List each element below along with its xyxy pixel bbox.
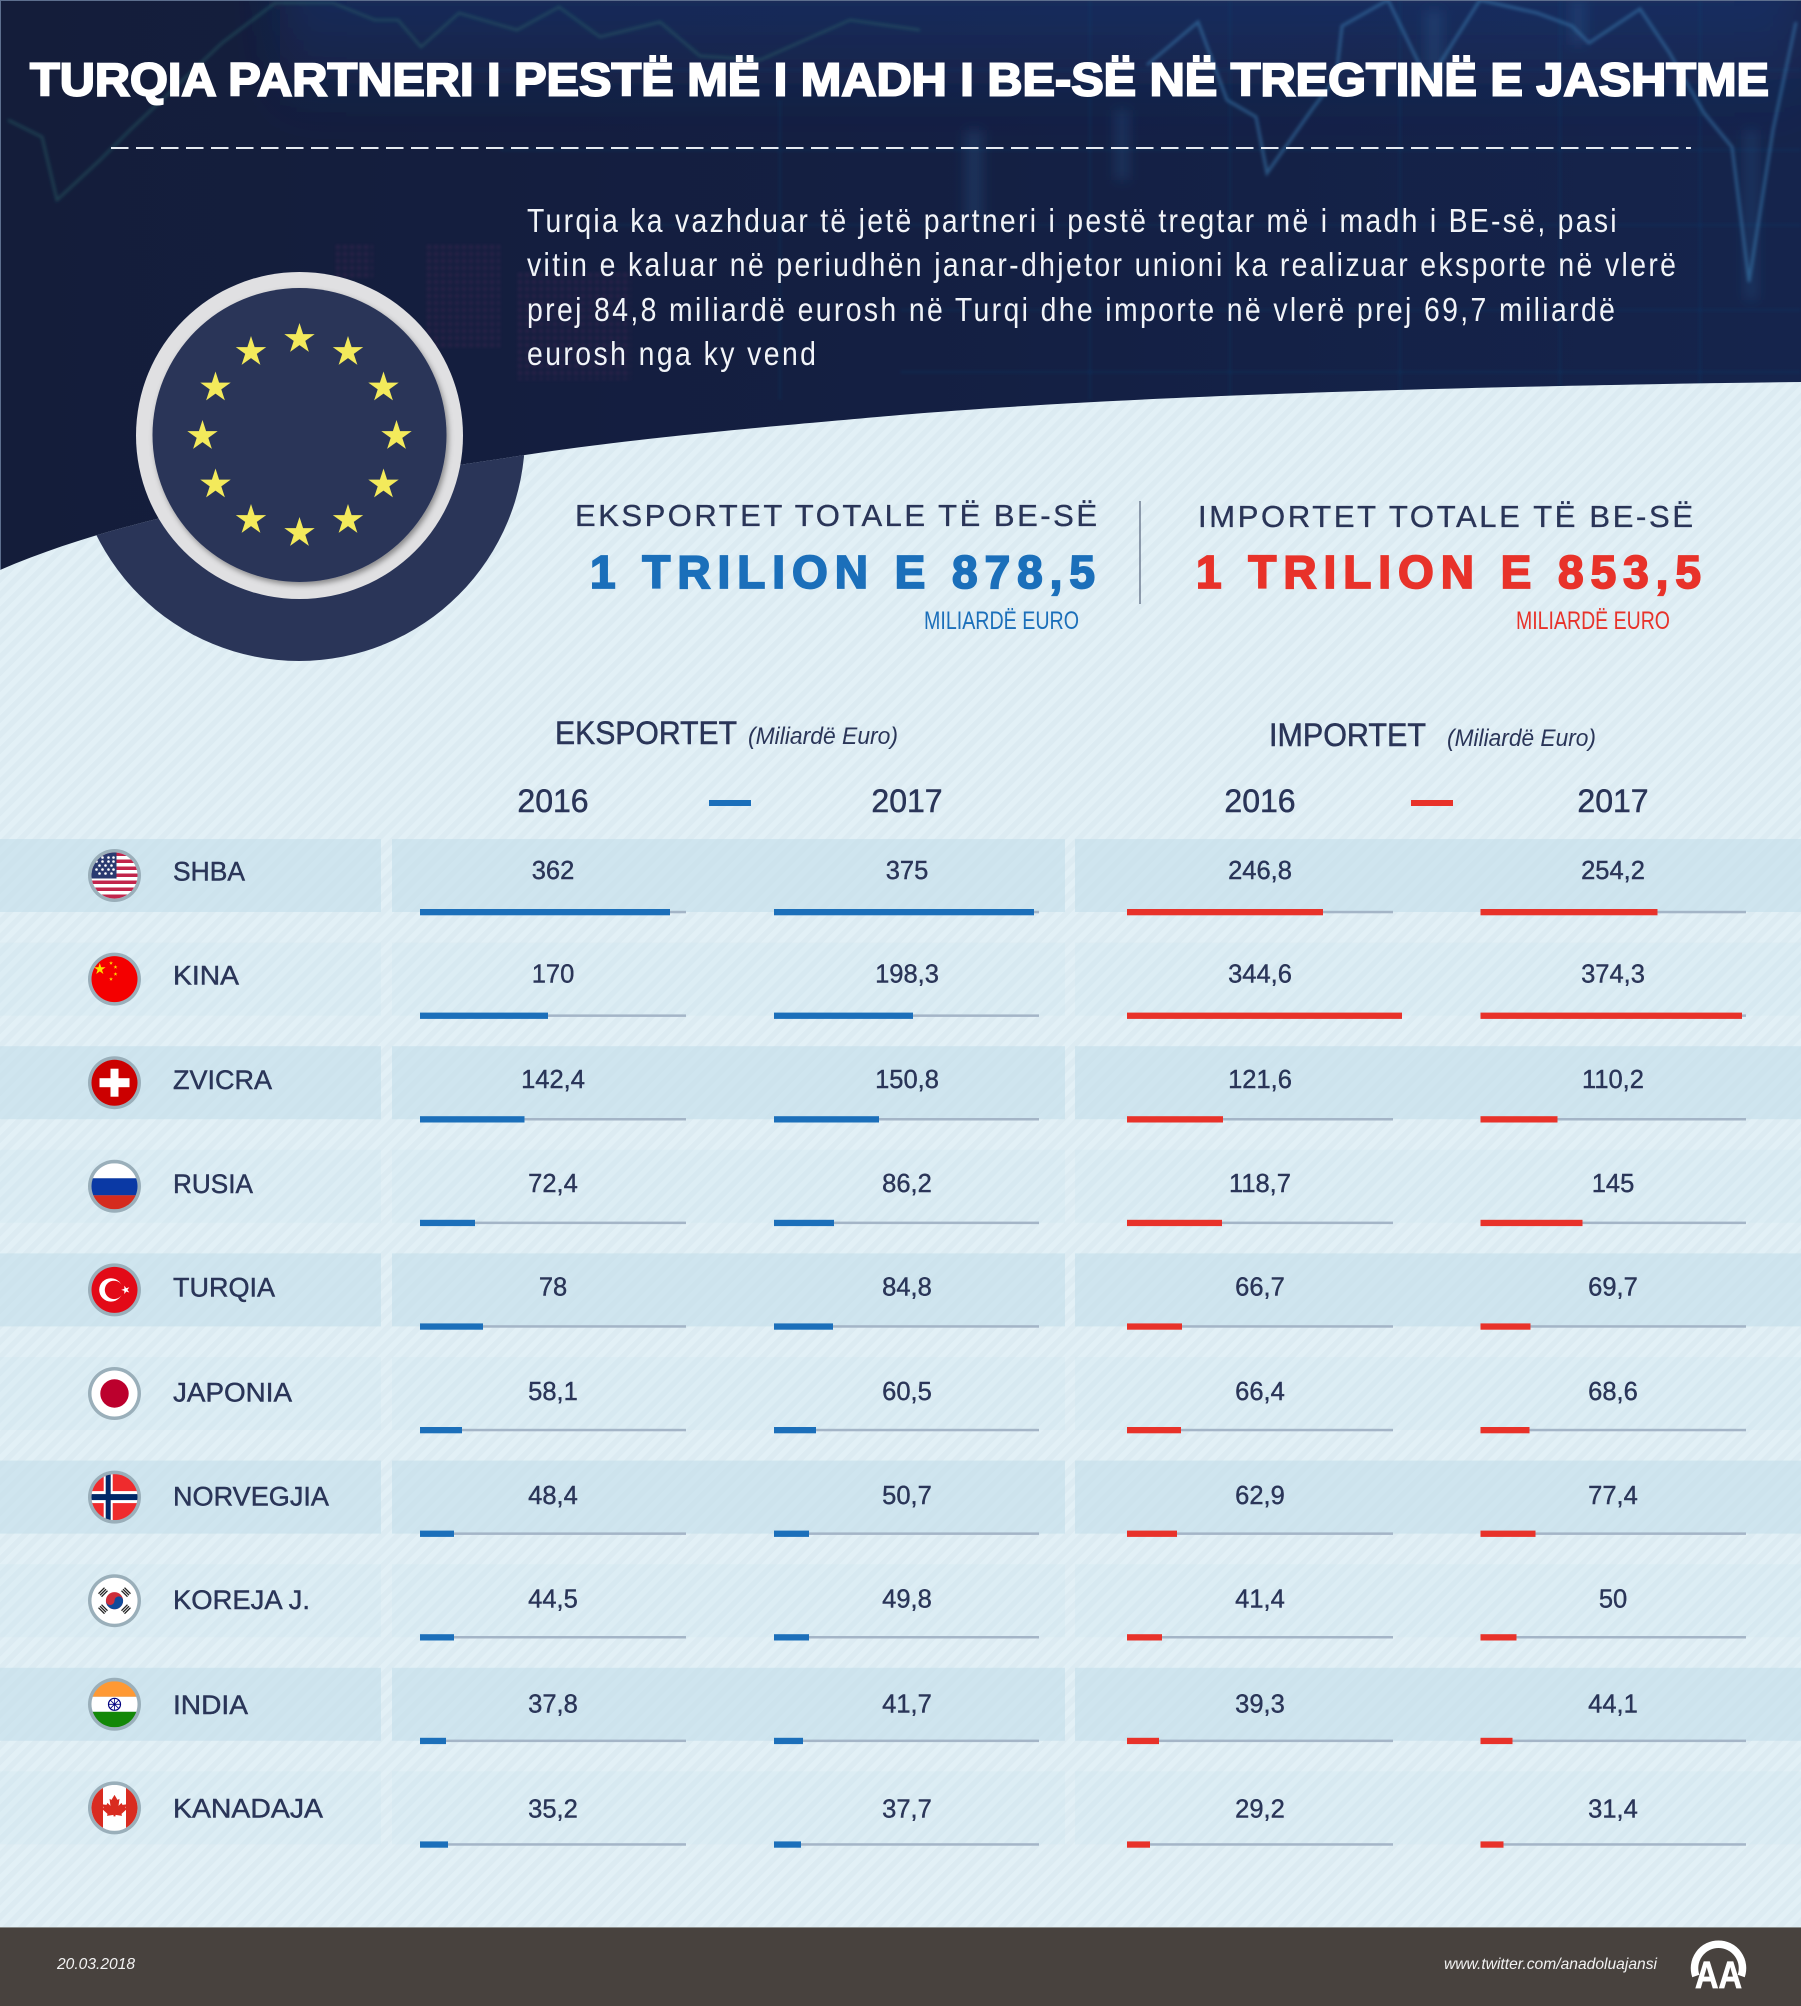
value: importe 2016: 344,6 bbox=[1228, 961, 1292, 989]
value: importe 2016: 41,4 bbox=[1235, 1586, 1285, 1614]
value: eksporte 2017: 86,2 bbox=[882, 1170, 932, 1198]
value: importe 2017 bbox=[1480, 1170, 1746, 1226]
value: importe 2017: 44,1 bbox=[1588, 1691, 1638, 1719]
value: eksporte 2017: 50,7 bbox=[882, 1482, 932, 1510]
value: eksporte 2017: 84,8 bbox=[882, 1274, 932, 1302]
value: eksporte 2017 bbox=[774, 1378, 1039, 1433]
row: INDIA bbox=[0, 1668, 1801, 1744]
row: RUSIA bbox=[88, 1160, 1746, 1226]
exports year headers: 2017 bbox=[871, 783, 943, 819]
value: eksporte 2016 bbox=[420, 1274, 686, 1330]
footer date: 20.03.2018 bbox=[56, 1956, 135, 1973]
value: importe 2016: 39,3 bbox=[1235, 1691, 1285, 1719]
row: JAPONIA bbox=[0, 1357, 1801, 1433]
icon: flag Russia bbox=[88, 1160, 141, 1213]
icon: flag Norway bbox=[88, 1471, 141, 1524]
icon: flag Canada bbox=[88, 1781, 141, 1834]
row: KINA: KINA bbox=[173, 961, 239, 991]
navy disc behind the EU emblem bbox=[96, 455, 524, 661]
value: importe 2017: 254,2 bbox=[1581, 857, 1645, 885]
value: eksporte 2016: 78 bbox=[539, 1274, 567, 1302]
value: importe 2016 bbox=[1127, 857, 1393, 915]
value: eksporte 2016 bbox=[420, 857, 686, 915]
intro text block: eurosh nga ky vend bbox=[527, 335, 816, 373]
row: KANADAJA bbox=[88, 1781, 1746, 1848]
value: importe 2016 bbox=[1127, 1066, 1393, 1122]
footer bar bbox=[0, 1927, 1801, 2006]
icon: flag Japan bbox=[88, 1367, 141, 1420]
value: importe 2017 bbox=[1480, 1066, 1746, 1122]
icon: Anadolu Agency logo: AA bbox=[1695, 1955, 1742, 1997]
value: eksporte 2017 bbox=[774, 961, 1039, 1019]
row: TURQIA: TURQIA bbox=[173, 1273, 275, 1303]
value: importe 2016: 246,8 bbox=[1228, 857, 1292, 885]
value: eksporte 2017 bbox=[774, 1170, 1039, 1226]
value: importe 2017 bbox=[1480, 1274, 1746, 1330]
value: importe 2017: 110,2 bbox=[1582, 1066, 1644, 1094]
title: TURQIA PARTNERI I PESTË MË I MADH I BE-SË NË TREGTINË E JASHTME bbox=[30, 54, 1769, 106]
imports year headers bbox=[1224, 783, 1649, 819]
value: eksporte 2016: 44,5 bbox=[528, 1586, 578, 1614]
row: ZVICRA bbox=[0, 1046, 1801, 1122]
intro text block: Turqia ka vazhduar të jetë partneri i pestë tregtar më i madh i BE-së, pasi bbox=[527, 202, 1617, 240]
value: importe 2016 bbox=[1127, 1482, 1393, 1537]
value: importe 2016 bbox=[1127, 1795, 1393, 1848]
value: importe 2016 bbox=[1127, 1691, 1393, 1744]
value: eksporte 2016: 58,1 bbox=[528, 1378, 578, 1406]
value: importe 2017 bbox=[1480, 1691, 1746, 1744]
imports column heading bbox=[1269, 717, 1596, 753]
row: KANADAJA: KANADAJA bbox=[173, 1793, 323, 1823]
exports year headers bbox=[517, 783, 943, 819]
value: importe 2017 bbox=[1480, 1586, 1746, 1640]
total imports callout: MILIARDË EURO bbox=[1516, 607, 1670, 635]
value: eksporte 2017 bbox=[774, 857, 1039, 915]
imports column heading: IMPORTET bbox=[1269, 717, 1426, 753]
value: importe 2016 bbox=[1127, 1586, 1393, 1640]
row: RUSIA: RUSIA bbox=[173, 1169, 253, 1199]
total imports callout bbox=[1196, 499, 1701, 635]
value: importe 2017: 69,7 bbox=[1588, 1274, 1638, 1302]
value: importe 2017: 145 bbox=[1592, 1170, 1634, 1198]
value: eksporte 2016 bbox=[420, 1066, 686, 1122]
value: eksporte 2017: 49,8 bbox=[882, 1586, 932, 1614]
icon: EU flag emblem bbox=[136, 272, 463, 599]
imports column heading: (Miliardë Euro) bbox=[1447, 725, 1596, 752]
total exports callout: 1 TRILION E 878,5 bbox=[590, 546, 1095, 598]
icon: flag South Korea bbox=[88, 1574, 141, 1627]
value: eksporte 2016 bbox=[420, 1482, 686, 1537]
imports year headers: 2017 bbox=[1577, 783, 1649, 819]
dashed divider bbox=[111, 147, 1691, 149]
total imports callout: 1 TRILION E 853,5 bbox=[1196, 546, 1701, 598]
value: importe 2017 bbox=[1480, 1378, 1746, 1433]
row: SHBA bbox=[0, 839, 1801, 915]
value: importe 2016: 121,6 bbox=[1228, 1066, 1292, 1094]
exports column heading bbox=[555, 715, 898, 751]
value: eksporte 2016 bbox=[420, 961, 686, 1019]
value: importe 2017 bbox=[1480, 1482, 1746, 1537]
row: KOREJA J.: KOREJA J. bbox=[173, 1585, 310, 1615]
light striped background with wave edge bbox=[0, 382, 1801, 1928]
value: eksporte 2017 bbox=[774, 1586, 1039, 1640]
value: importe 2017 bbox=[1480, 1795, 1746, 1848]
row: NORVEGJIA: NORVEGJIA bbox=[173, 1482, 329, 1512]
value: eksporte 2016: 48,4 bbox=[528, 1482, 578, 1510]
value: eksporte 2016 bbox=[420, 1586, 686, 1640]
value: eksporte 2017 bbox=[774, 1691, 1039, 1744]
value: eksporte 2017: 37,7 bbox=[882, 1795, 932, 1823]
icon: flag India bbox=[88, 1678, 141, 1731]
value: eksporte 2017 bbox=[774, 1066, 1039, 1122]
value: importe 2016: 29,2 bbox=[1235, 1795, 1285, 1823]
value: importe 2017 bbox=[1480, 961, 1746, 1019]
value: importe 2016 bbox=[1127, 961, 1402, 1019]
footer twitter link text: www.twitter.com/anadoluajansi bbox=[1444, 1956, 1657, 1973]
value: eksporte 2017: 150,8 bbox=[875, 1066, 939, 1094]
total exports callout: MILIARDË EURO bbox=[924, 607, 1079, 635]
value: importe 2016: 66,7 bbox=[1235, 1274, 1285, 1302]
value: eksporte 2017 bbox=[774, 1482, 1039, 1537]
value: eksporte 2016: 142,4 bbox=[521, 1066, 585, 1094]
value: importe 2017 bbox=[1480, 857, 1746, 915]
value: importe 2016 bbox=[1127, 1170, 1393, 1226]
row: NORVEGJIA bbox=[0, 1461, 1801, 1537]
icon: flag Switzerland bbox=[88, 1056, 141, 1109]
row: ZVICRA: ZVICRA bbox=[173, 1065, 272, 1095]
intro text block: prej 84,8 miliardë eurosh në Turqi dhe importe në vlerë prej 69,7 miliardë bbox=[527, 291, 1615, 329]
total exports callout: EKSPORTET TOTALE TË BE-SË bbox=[575, 498, 1097, 533]
row: JAPONIA: JAPONIA bbox=[173, 1378, 292, 1408]
icon: flag China bbox=[88, 953, 141, 1006]
row: SHBA: SHBA bbox=[173, 856, 245, 886]
value: eksporte 2016 bbox=[420, 1795, 686, 1848]
value: importe 2016: 118,7 bbox=[1229, 1170, 1291, 1198]
value: eksporte 2016 bbox=[420, 1170, 686, 1226]
value: importe 2016: 62,9 bbox=[1235, 1482, 1285, 1510]
value: importe 2017: 68,6 bbox=[1588, 1378, 1638, 1406]
total imports callout: IMPORTET TOTALE TË BE-SË bbox=[1198, 499, 1693, 534]
imports year headers: 2016 bbox=[1224, 783, 1296, 819]
icon: flag Turkey bbox=[88, 1263, 141, 1316]
value: eksporte 2016 bbox=[420, 1378, 686, 1433]
value: importe 2017: 77,4 bbox=[1588, 1482, 1638, 1510]
value: eksporte 2016: 37,8 bbox=[528, 1691, 578, 1719]
value: eksporte 2017 bbox=[774, 1274, 1039, 1330]
value: eksporte 2016: 35,2 bbox=[528, 1795, 578, 1823]
intro text block: vitin e kaluar në periudhën janar-dhjetor unioni ka realizuar eksporte në vlerë bbox=[527, 246, 1676, 284]
row: KOREJA J. bbox=[0, 1564, 1801, 1640]
exports column heading: (Miliardë Euro) bbox=[748, 723, 898, 750]
row: TURQIA bbox=[0, 1253, 1801, 1330]
value: importe 2016 bbox=[1127, 1378, 1393, 1433]
row: KINA bbox=[0, 943, 1801, 1019]
exports year headers: 2016 bbox=[517, 783, 589, 819]
value: importe 2017: 31,4 bbox=[1588, 1795, 1638, 1823]
value: eksporte 2017 bbox=[774, 1795, 1039, 1848]
row: INDIA: INDIA bbox=[173, 1690, 248, 1720]
value: eksporte 2017: 60,5 bbox=[882, 1378, 932, 1406]
icon: flag USA bbox=[88, 849, 141, 902]
value: eksporte 2017: 375 bbox=[886, 857, 928, 885]
value: eksporte 2017: 41,7 bbox=[882, 1691, 932, 1719]
value: importe 2017: 374,3 bbox=[1581, 961, 1645, 989]
exports column heading: EKSPORTET bbox=[555, 715, 737, 751]
value: eksporte 2016: 170 bbox=[532, 961, 574, 989]
stat divider bbox=[1139, 501, 1141, 604]
value: eksporte 2016: 362 bbox=[532, 857, 574, 885]
value: importe 2017: 50 bbox=[1599, 1586, 1627, 1614]
value: eksporte 2016: 72,4 bbox=[528, 1170, 578, 1198]
value: eksporte 2016 bbox=[420, 1691, 686, 1744]
value: importe 2016 bbox=[1127, 1274, 1393, 1330]
total exports callout bbox=[575, 498, 1097, 635]
header background: market chart bbox=[0, 0, 1801, 600]
value: importe 2016: 66,4 bbox=[1235, 1378, 1285, 1406]
intro text block bbox=[527, 202, 1676, 373]
value: eksporte 2017: 198,3 bbox=[875, 961, 939, 989]
